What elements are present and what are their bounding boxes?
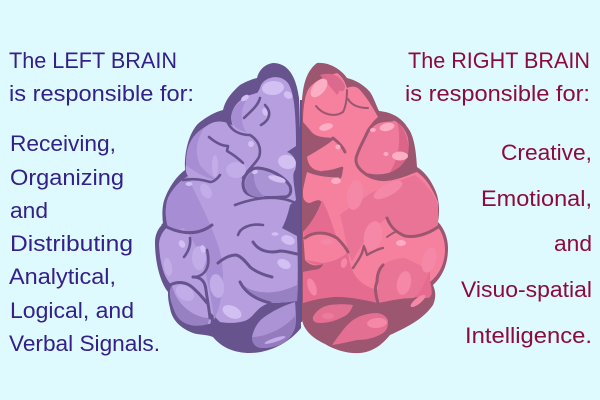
- left body text: Organizing: [10, 165, 124, 190]
- left outline: [155, 63, 301, 353]
- right cortex: [303, 73, 445, 303]
- left text block: [9, 48, 194, 356]
- right heading: The RIGHT BRAIN: [408, 48, 590, 73]
- left body text: Distributing: [10, 231, 133, 256]
- right body text: and: [554, 231, 592, 256]
- right heading: [405, 48, 590, 106]
- left shaded region: [166, 127, 223, 320]
- left body text: Verbal Signals.: [9, 331, 160, 356]
- left body text: Analytical,: [9, 264, 116, 289]
- right outline: [302, 63, 448, 353]
- right body text: Creative,: [501, 140, 592, 165]
- left heading: The LEFT BRAIN: [9, 48, 177, 73]
- left hemisphere: [155, 63, 301, 353]
- right hemisphere: [300, 63, 448, 353]
- left heading: [9, 48, 194, 106]
- left body text: [9, 131, 160, 356]
- left small lobe: [243, 168, 291, 198]
- right text block: [405, 48, 592, 348]
- right highlights: [307, 76, 408, 246]
- left body text: and: [10, 198, 48, 223]
- left top lobe shade: [231, 98, 248, 132]
- right body text: Intelligence.: [465, 323, 592, 348]
- left body text: Receiving,: [10, 131, 116, 156]
- left lower shade: [170, 282, 297, 326]
- left cortex: [159, 77, 298, 326]
- right lower darker shade: [303, 200, 432, 303]
- left highlights: [177, 80, 298, 322]
- right body text: Visuo-spatial: [461, 277, 592, 302]
- brain illustration: [155, 63, 448, 353]
- left body text: Logical, and: [10, 298, 134, 323]
- right upper lobe: [356, 120, 409, 174]
- right bottom lobes: [313, 304, 353, 323]
- center band: [300, 100, 302, 322]
- right top lobe detail: [320, 74, 345, 95]
- right heading: is responsible for:: [405, 81, 590, 106]
- right dim highlights: [321, 239, 427, 309]
- right body text: Emotional,: [481, 186, 592, 211]
- left heading: is responsible for:: [9, 81, 194, 106]
- right patches: [305, 177, 439, 329]
- left bottom lobe: [252, 302, 296, 348]
- left patches: [162, 155, 286, 345]
- right body text: [461, 140, 592, 348]
- left sulci: [163, 98, 297, 318]
- right sulci: [305, 90, 438, 303]
